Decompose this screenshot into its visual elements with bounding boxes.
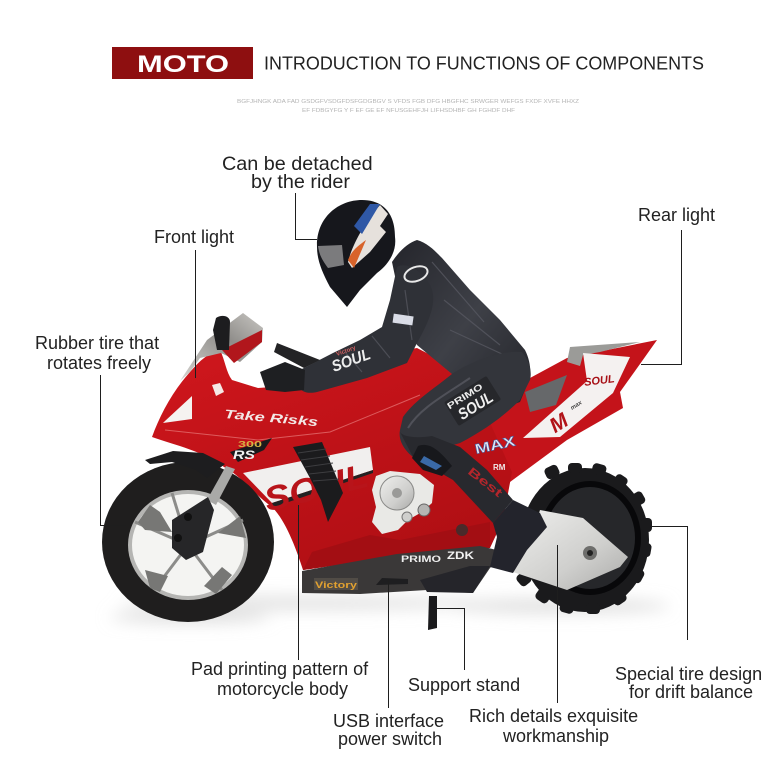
arm logo: SOUL	[330, 346, 373, 376]
label: pad printing: motorcycle body	[217, 679, 348, 699]
leader lines	[100, 193, 688, 708]
label: rear light: Rear light	[638, 205, 715, 225]
rear wheel	[515, 462, 652, 615]
logos on rear frame: RM	[493, 463, 506, 472]
side marker	[212, 383, 224, 396]
main red body	[152, 348, 512, 570]
kickstand	[428, 596, 437, 630]
logo: 300: RS	[233, 448, 255, 462]
nose highlight	[165, 395, 420, 440]
rear swing plate	[513, 510, 628, 590]
label: support stand: Support stand	[408, 675, 520, 695]
glove and handlebar	[274, 343, 320, 368]
mirror	[213, 316, 230, 350]
rear tail body	[480, 340, 657, 482]
tail decal: max	[570, 400, 584, 412]
dark lower chassis: PRIMO	[401, 554, 441, 564]
small caption: EF FDBGYFG Y F EF GE EF NFUSGEHFJH LIFHSDHBF GH FGHDF DHF	[302, 108, 516, 114]
label: pad printing: Pad printing pattern of	[191, 659, 369, 679]
label: can be detached: by the rider	[251, 171, 350, 193]
label: usb: USB interface	[333, 711, 444, 731]
small caption: BGFJHNGK ADA FAD GSDGFVSDGFDSFGDGBGV S VFDS FGB DFG HBGFHC SRWGER WEFGS FXDF XVFE HHXZ	[237, 99, 580, 105]
label: rich details: Rich details exquisite	[469, 706, 638, 726]
boot	[490, 500, 547, 573]
arm patch	[393, 314, 414, 325]
front fender	[145, 451, 225, 478]
lower fairing shade	[303, 522, 490, 570]
lower leg	[400, 432, 513, 523]
helmet	[317, 200, 395, 307]
tail rail	[567, 342, 640, 366]
label: can be detached: Can be detached	[222, 153, 373, 175]
dark lower chassis: ZDK	[447, 550, 474, 562]
label: usb: power switch	[338, 729, 442, 749]
front fork	[172, 466, 235, 560]
dark lower chassis	[302, 546, 505, 594]
label: rubber tire: rotates freely	[47, 353, 151, 373]
tail decal: SOUL	[584, 373, 616, 389]
small caption	[237, 99, 580, 114]
bolt	[456, 524, 468, 536]
jacket	[392, 240, 530, 420]
primo logo: SOUL	[455, 389, 497, 424]
arm	[300, 265, 433, 393]
headlight	[163, 396, 192, 423]
front wheel	[102, 462, 274, 622]
ground shadow	[110, 596, 670, 622]
knee pad	[412, 445, 452, 476]
shoulder logo	[402, 263, 430, 285]
fairing stripe with logo: SOUL	[260, 457, 372, 519]
primo logo	[444, 376, 502, 427]
header badge: MOTO: MOTO	[137, 51, 229, 78]
fairing stripe with logo	[243, 447, 373, 519]
windscreen	[180, 313, 263, 381]
label: rubber tire: Rubber tire that	[35, 333, 159, 353]
red best logo: Best	[465, 464, 505, 500]
engine cover	[372, 471, 434, 534]
logos on rear frame	[473, 433, 518, 472]
logo: Take Risks: Take Risks	[224, 407, 319, 429]
label: special tire: Special tire design	[615, 664, 762, 684]
seat	[525, 375, 567, 412]
label: special tire: for drift balance	[629, 682, 753, 702]
rider	[260, 240, 547, 573]
thigh	[400, 352, 531, 457]
tail decal	[523, 353, 630, 438]
tail decal: M	[545, 409, 573, 438]
logos on rear frame: MAX	[473, 433, 518, 457]
dark lower chassis: Victory	[315, 580, 357, 590]
label: front light: Front light	[154, 227, 234, 247]
header badge: MOTO	[112, 47, 253, 79]
logo: 300: 300	[238, 440, 263, 449]
side vent	[293, 442, 343, 522]
motorcycle	[102, 200, 657, 630]
rider: Victory	[336, 345, 357, 358]
primo logo: PRIMO	[445, 381, 485, 411]
logo: 300	[230, 438, 272, 462]
label: rich details: workmanship	[502, 726, 609, 746]
heading: INTRODUCTION TO FUNCTIONS OF COMPONENTS	[264, 54, 704, 74]
